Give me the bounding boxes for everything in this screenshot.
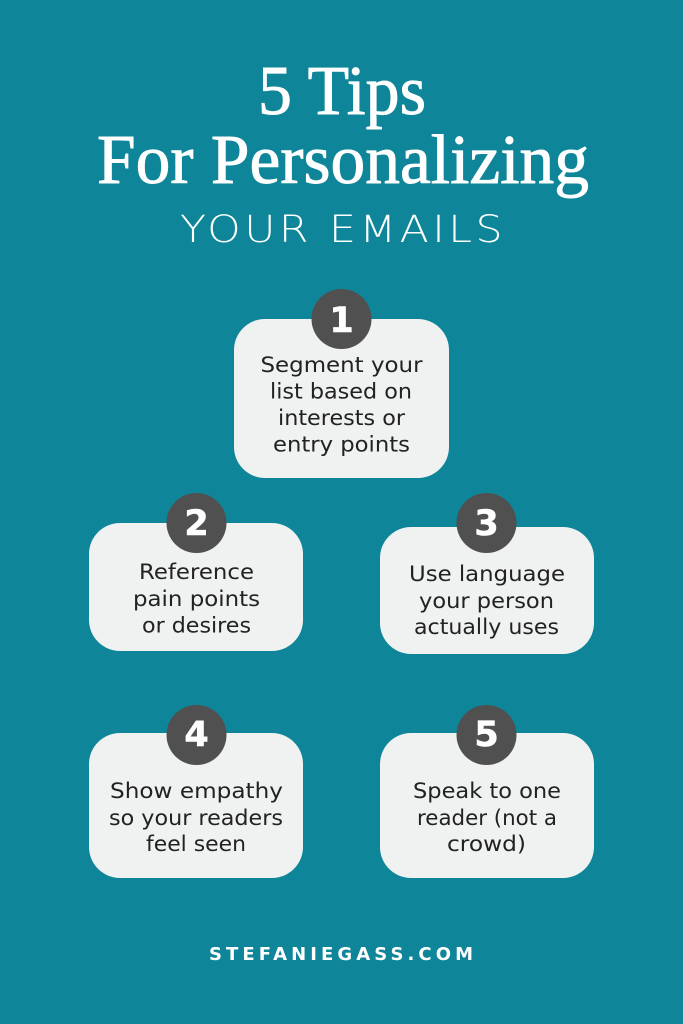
tip 2 text: pain points bbox=[133, 587, 260, 611]
tip 3 text bbox=[409, 562, 565, 639]
tip 5 text bbox=[413, 779, 561, 856]
icon: number 4 badge: 4 bbox=[184, 715, 209, 755]
icon: number 2 badge: 2 bbox=[184, 504, 209, 544]
tip 1 text bbox=[260, 353, 423, 456]
panel: tip 1 bbox=[234, 289, 449, 478]
icon: number 5 badge: 5 bbox=[474, 715, 499, 755]
tip 3 text: your person bbox=[419, 589, 554, 613]
tip 5 text: crowd) bbox=[447, 832, 526, 856]
panel: tip 3 bbox=[380, 493, 594, 654]
panel: tip 4 bbox=[89, 705, 303, 878]
footer website: STEFANIEGASS.COM bbox=[209, 944, 473, 965]
panel: tip 5 bbox=[380, 705, 594, 878]
tip 4 text bbox=[109, 779, 283, 856]
icon: number 5 badge bbox=[456, 705, 516, 765]
tip 1 text: entry points bbox=[273, 432, 410, 456]
tip 2 text: Reference bbox=[139, 560, 254, 584]
title bbox=[97, 53, 589, 199]
panel: tip 2 bbox=[89, 493, 303, 651]
tip 2 text bbox=[133, 560, 260, 638]
tip 2 text: or desires bbox=[142, 614, 251, 638]
tip 1 text: Segment your bbox=[260, 353, 423, 377]
icon: number 2 badge bbox=[166, 493, 226, 553]
subtitle: YOUR EMAILS bbox=[180, 208, 506, 251]
icon: number 3 badge bbox=[456, 493, 516, 553]
title: For Personalizing bbox=[97, 122, 589, 199]
tip 5 text: reader (not a bbox=[417, 806, 557, 830]
icon: number 1 badge bbox=[312, 289, 372, 349]
tip 3 text: Use language bbox=[409, 562, 565, 586]
tip 3 text: actually uses bbox=[414, 615, 559, 639]
icon: number 3 badge: 3 bbox=[474, 504, 499, 544]
tip 4 text: Show empathy bbox=[110, 779, 283, 803]
tip 4 text: so your readers bbox=[109, 806, 283, 830]
icon: number 1 badge: 1 bbox=[329, 301, 354, 341]
tip 4 text: feel seen bbox=[146, 832, 246, 856]
title: 5 Tips bbox=[258, 53, 426, 130]
tip 1 text: interests or bbox=[278, 406, 405, 430]
icon: number 4 badge bbox=[166, 705, 226, 765]
tip 5 text: Speak to one bbox=[413, 779, 561, 803]
tip 1 text: list based on bbox=[270, 380, 412, 404]
